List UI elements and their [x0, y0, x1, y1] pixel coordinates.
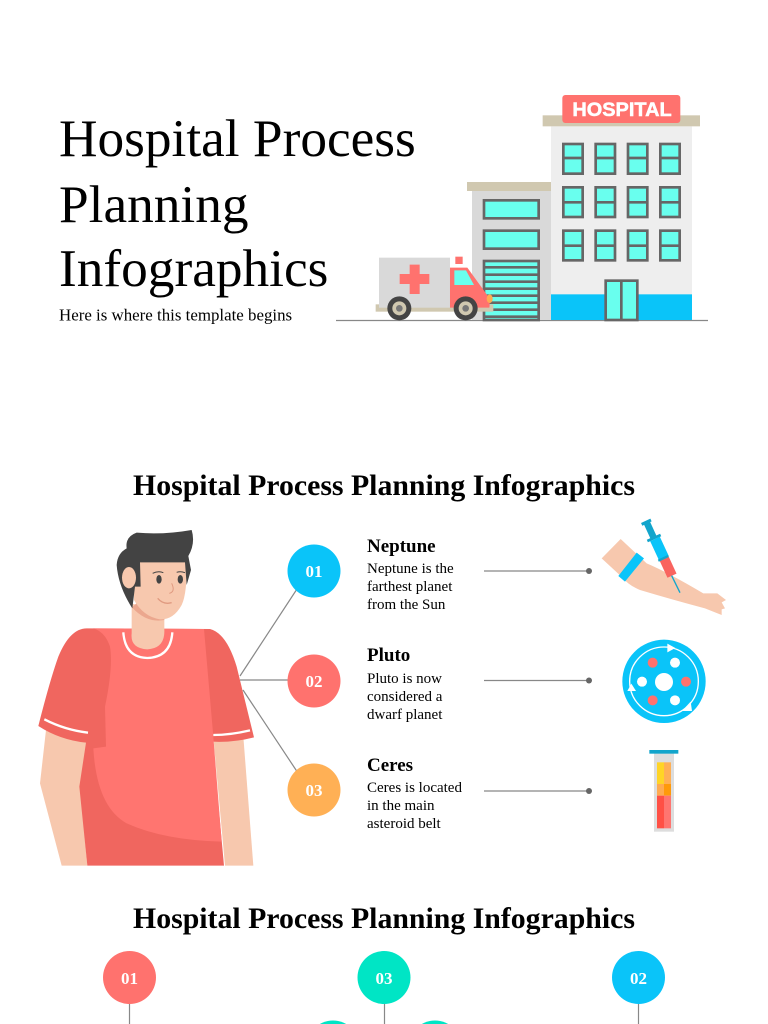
bottom badge 02: 02 [630, 969, 647, 988]
bottom badge 01 [103, 951, 156, 1024]
text block: Neptune: Neptune is the [367, 561, 454, 577]
icon: arm with syringe [602, 520, 726, 615]
connector: Ceres [484, 788, 592, 794]
icon: test tube [649, 750, 678, 832]
title: Infographics [59, 239, 328, 298]
text block: Pluto [367, 645, 443, 723]
text block: Ceres: in the main [367, 798, 435, 814]
connector: Neptune [484, 568, 592, 574]
text block: Neptune: farthest planet [367, 579, 453, 595]
subtitle: Here is where this template begins [59, 306, 292, 324]
hospital illustration: HOSPITAL [572, 100, 672, 121]
text block: Ceres: asteroid belt [367, 816, 442, 832]
text block: Neptune: from the Sun [367, 597, 446, 613]
bottom badge 03 [358, 951, 410, 1024]
text block: Pluto: Pluto [367, 645, 410, 666]
step 02 badge: 02 [306, 672, 322, 691]
step 03 badge [288, 764, 340, 816]
heading: section one: Hospital Process Planning Infographics [133, 469, 635, 502]
title: Planning [59, 175, 249, 234]
bottom badge 03: 03 [376, 969, 392, 988]
bottom badge partial left [306, 1020, 360, 1024]
bottom badge 01: 01 [121, 969, 138, 988]
step 01 badge [288, 544, 340, 598]
icon: centrifuge disc [622, 640, 706, 723]
bottom badge 02 [612, 951, 665, 1024]
heading: section two: Hospital Process Planning Infographics [133, 902, 635, 935]
hospital illustration [336, 95, 708, 320]
text block: Pluto: considered a [367, 689, 443, 705]
text block: Ceres: Ceres [367, 755, 413, 776]
text block: Ceres: Ceres is located [367, 780, 462, 796]
text block: Neptune [367, 536, 454, 613]
text block: Ceres [367, 755, 462, 832]
step 02 badge [288, 654, 340, 708]
title [59, 109, 416, 298]
bottom badge partial right [408, 1020, 462, 1024]
person illustration [38, 530, 254, 866]
text block: Pluto: dwarf planet [367, 707, 443, 723]
connector: Pluto [484, 678, 592, 684]
text block: Neptune: Neptune [367, 536, 436, 557]
step 01 badge: 01 [306, 562, 322, 581]
title: Hospital Process [59, 109, 416, 168]
step 03 badge: 03 [306, 781, 322, 800]
connector lines from person [240, 589, 298, 773]
text block: Pluto: Pluto is now [367, 671, 442, 687]
